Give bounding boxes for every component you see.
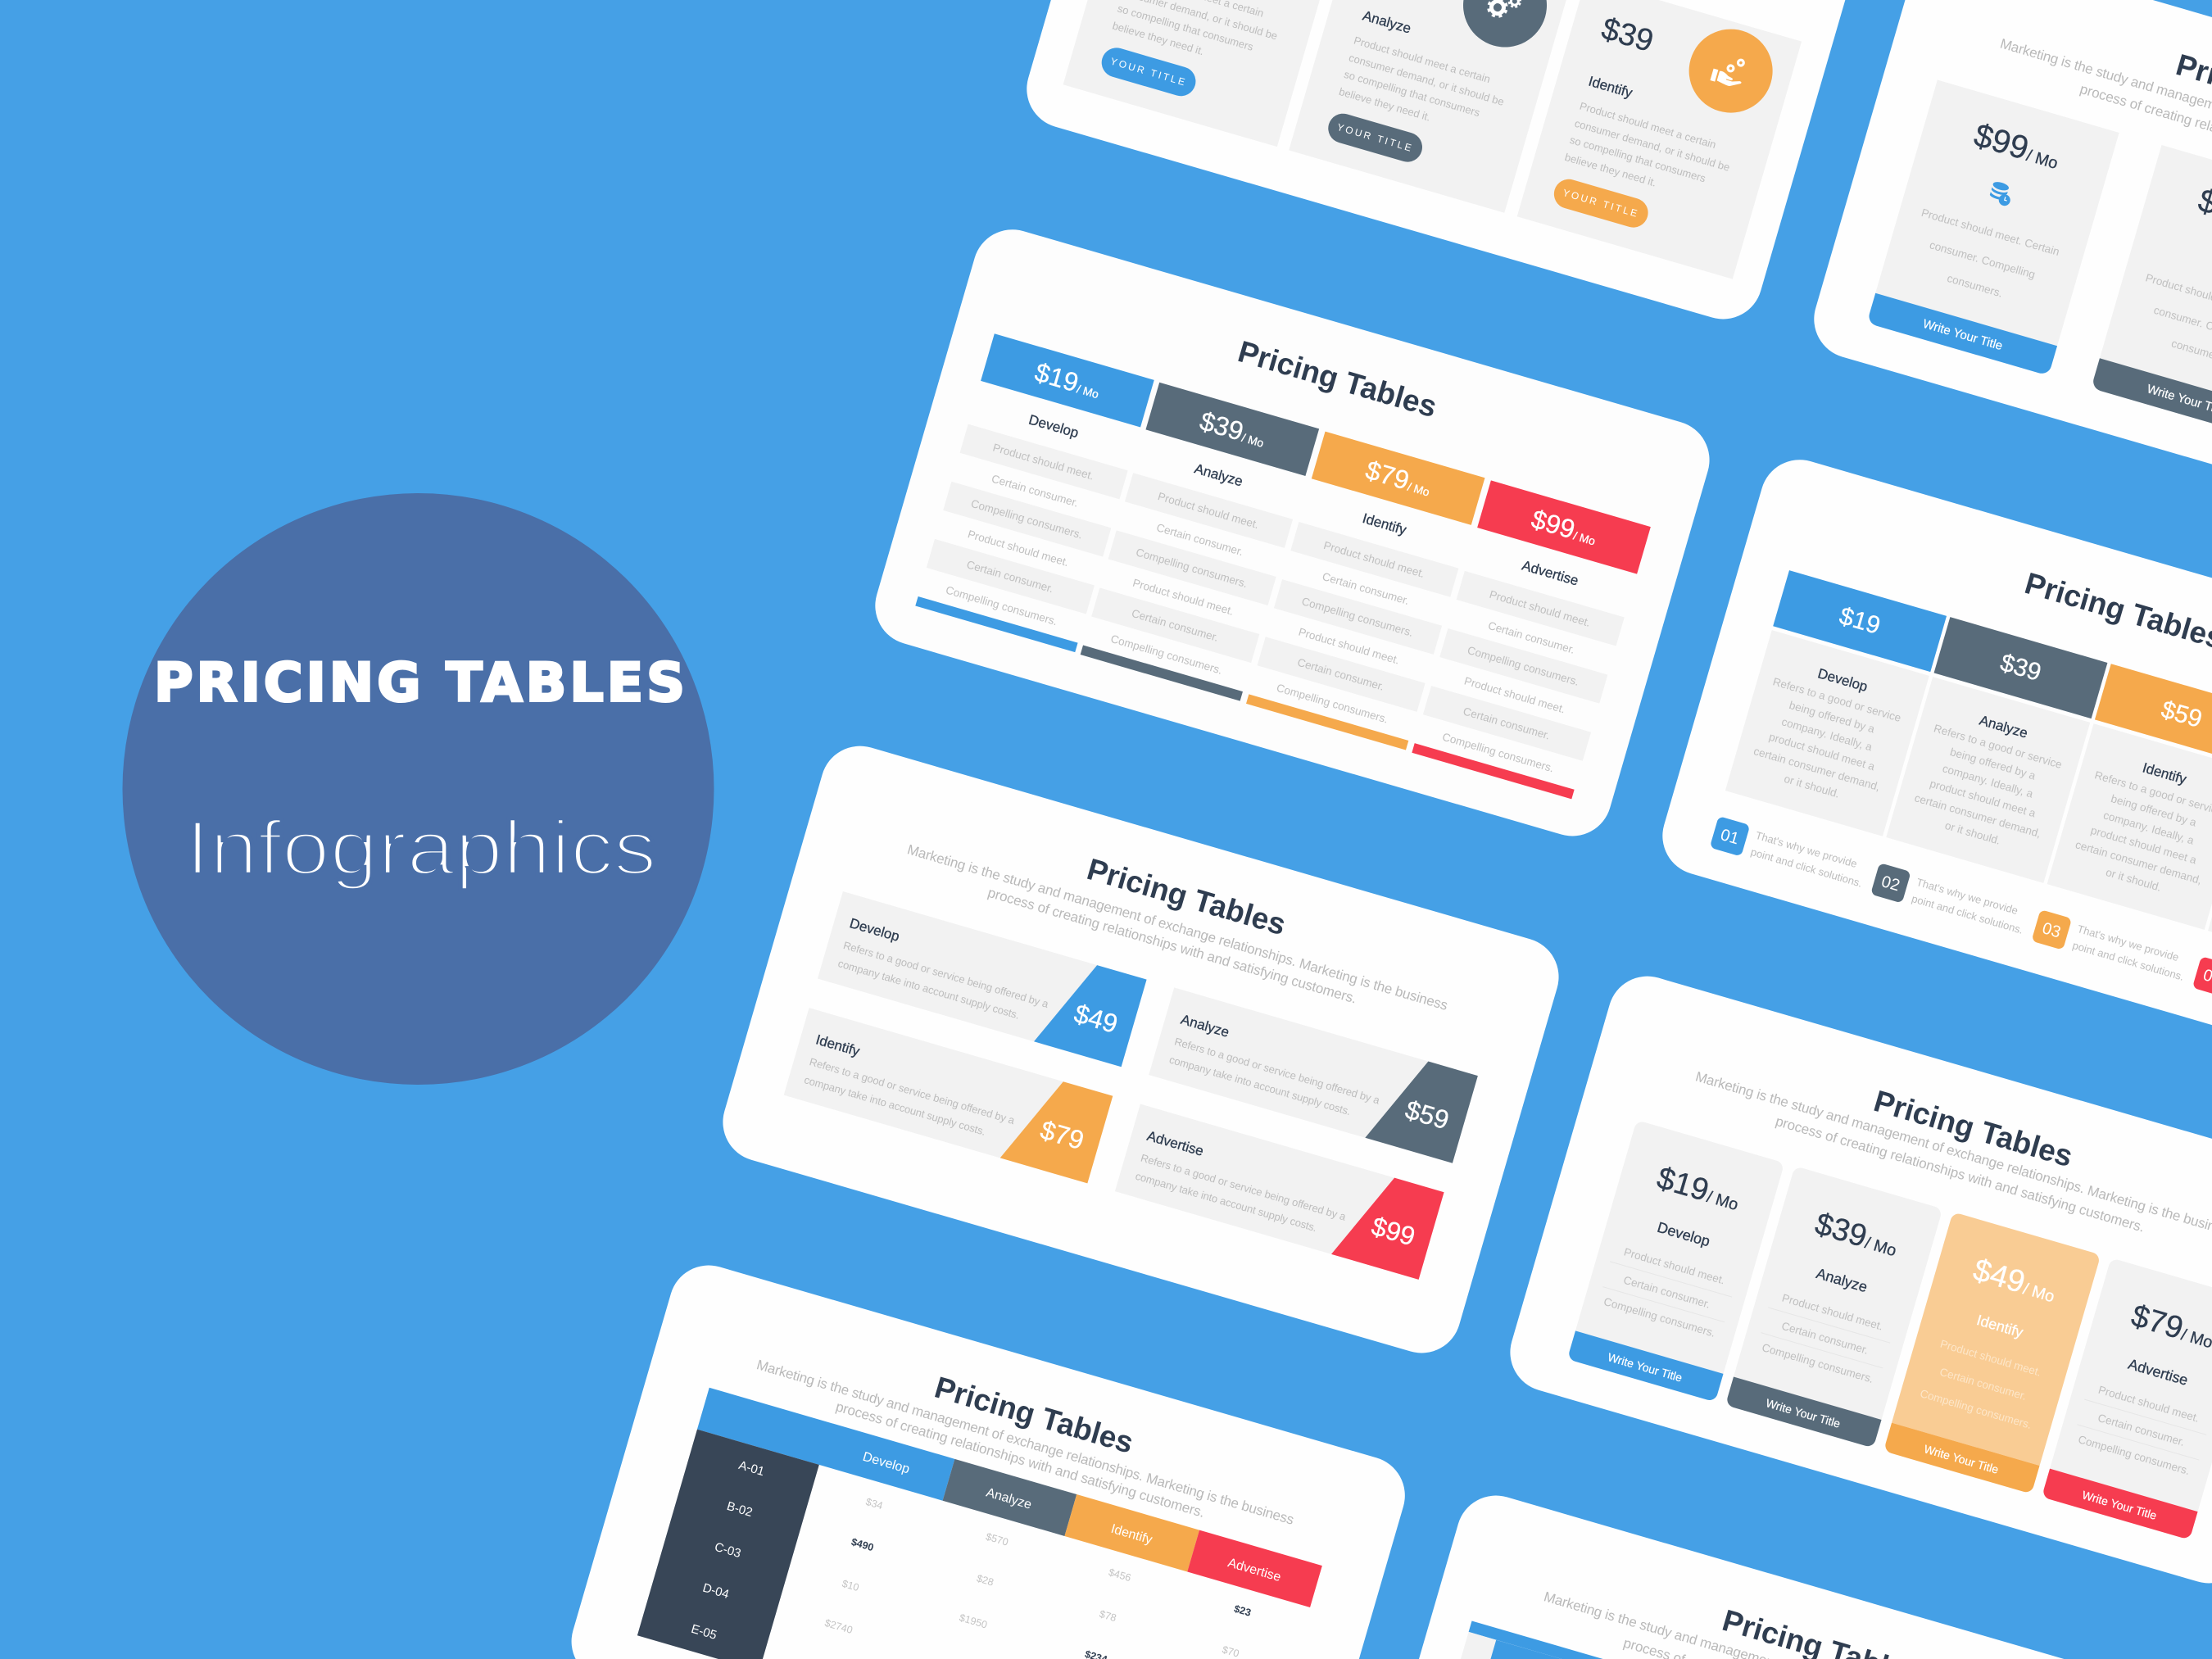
legend 02: 02: [1879, 873, 1902, 895]
subheading: infographics: Infographics: [185, 805, 657, 891]
striped rows: Product should meet.: [1297, 626, 1401, 667]
plan 1 price: $99/ Mo: [1970, 117, 2064, 176]
body: [1886, 677, 2090, 883]
description: Refers to a good or service: [1771, 675, 1902, 724]
column 2 background: [1289, 0, 1574, 213]
price: $79: [1037, 1115, 1087, 1155]
description: being offered by a: [2110, 792, 2198, 829]
column 3 description: [1563, 100, 1736, 207]
price tag: [1034, 954, 1147, 1067]
values: analyze: [958, 1530, 1013, 1631]
column 2 description: Product should meet a certain: [1353, 34, 1492, 85]
features: Certain consumer.: [1780, 1320, 1870, 1357]
values: advertise: $23: [1233, 1603, 1253, 1619]
price: $39: [1997, 649, 2044, 687]
price: $99/ Mo: [1528, 504, 1601, 551]
column: develop: [1725, 570, 1947, 836]
legend 03: point and click solutions.: [2071, 939, 2186, 983]
icon: hand with coins in orange circle: [1679, 19, 1783, 123]
features: Certain consumer.: [1938, 1366, 2028, 1403]
description: [1907, 722, 2064, 858]
column 3 background: [1517, 0, 1802, 279]
subtitle: process of creating relationships with and satisfying customers.: [986, 885, 1358, 1007]
body: [1725, 630, 1929, 836]
label: Advertise: [1521, 558, 1580, 589]
striped rows: Product should meet.: [991, 442, 1095, 483]
plan 2: [2091, 145, 2212, 441]
label: Identify: [1974, 1312, 2025, 1340]
legend 02: That's why we provide: [1915, 876, 2019, 917]
subtitle: process of creating relationships with and satisfying customers.: [834, 1398, 1207, 1521]
subtitle: Marketing is the study and management of exchange relationships. Marketing is the business: [905, 841, 1449, 1013]
column: identify: [1246, 432, 1484, 750]
label: Analyze: [1978, 713, 2029, 741]
footer: [1725, 1376, 1882, 1448]
column 3 description: consumer demand, or it should be: [1573, 117, 1731, 174]
footer label: Write Your Title: [1923, 1442, 2001, 1476]
plan 1 footer: [1867, 293, 2057, 376]
striped rows: Compelling consumers.: [1135, 546, 1249, 590]
legend 03: [2032, 909, 2191, 985]
row labels: B-02: [725, 1499, 754, 1520]
subtitle: [1992, 36, 2212, 228]
row labels: C-03: [713, 1540, 742, 1561]
panel: four row pricing list: [714, 737, 1568, 1362]
column: analyze: [1081, 383, 1319, 701]
header: advertise: [1187, 1530, 1322, 1607]
price: $49/ Mo: [1969, 1253, 2060, 1309]
price: $19/ Mo: [1653, 1161, 1744, 1217]
striped rows: [1086, 473, 1293, 684]
description: being offered by a: [1949, 746, 2037, 782]
striped rows: Compelling consumers.: [1300, 595, 1415, 639]
features: [2072, 1380, 2212, 1479]
footer: [1567, 1330, 1724, 1402]
values: identify: [1083, 1566, 1132, 1659]
description: product should meet a: [1768, 731, 1877, 773]
subtitle: [1536, 1589, 2086, 1659]
plan: advertise: [2042, 1258, 2212, 1540]
description: Refers to a good or service being offered by a: [1140, 1152, 1348, 1223]
label: Analyze: [1179, 1012, 1231, 1040]
column 3 button: YOUR TITLE: [1562, 187, 1641, 220]
features: Product should meet.: [1622, 1245, 1726, 1286]
price tag: [1331, 1167, 1444, 1280]
label: Develop: [1816, 665, 1870, 695]
price: $59: [1402, 1095, 1453, 1135]
values: analyze: $1950: [958, 1611, 989, 1631]
label: Develop: [1656, 1219, 1712, 1249]
features: Certain consumer.: [1622, 1274, 1711, 1311]
description: or it should.: [2105, 866, 2163, 894]
striped rows: Product should meet.: [1157, 490, 1260, 531]
item: develop: [818, 891, 1147, 1067]
values: develop: [823, 1494, 890, 1636]
legend 03: 03: [2040, 919, 2063, 942]
panel: comparison table: [562, 1256, 1414, 1659]
row labels: D-04: [701, 1581, 731, 1602]
legend 01: point and click solutions.: [1749, 845, 1864, 890]
row labels: A-01: [737, 1458, 766, 1479]
striped rows: [1417, 571, 1625, 782]
striped rows: Product should meet.: [1463, 674, 1566, 715]
values: develop: $490: [850, 1536, 875, 1553]
description: company take into account supply costs.: [1168, 1054, 1353, 1117]
header: develop: Develop: [861, 1450, 911, 1477]
striped rows: Product should meet.: [967, 528, 1070, 569]
table header strip: [1469, 1620, 2132, 1659]
panel: rounded plan cards: [1501, 967, 2212, 1593]
features: Compelling consumers.: [1919, 1387, 2033, 1431]
features: Compelling consumers.: [1602, 1295, 1716, 1339]
subtitle: Marketing is the study and management of exchange relationships. Marketing is the business: [755, 1357, 1296, 1528]
striped rows: Compelling consumers.: [969, 497, 1084, 542]
description: company take into account supply costs.: [836, 957, 1021, 1022]
header: advertise: Advertise: [1226, 1556, 1282, 1584]
header: develop: [697, 1388, 954, 1501]
bottom bar: [1081, 646, 1243, 701]
striped rows: Compelling consumers.: [1275, 682, 1389, 726]
column: analyze: [1886, 617, 2107, 883]
column 2 label: Analyze: [1361, 7, 1413, 37]
values: analyze: $28: [976, 1572, 995, 1589]
legend 02: [1870, 863, 2030, 938]
row labels: [637, 1430, 819, 1659]
description: certain consumer demand,: [2074, 838, 2203, 886]
description: company. Ideally, a: [1941, 762, 2035, 800]
striped rows: Certain consumer.: [1296, 656, 1385, 693]
header: analyze: [943, 1459, 1077, 1536]
title: Pricing Tables: [931, 1371, 1137, 1460]
plan 1 description: [1905, 206, 2061, 311]
title: Pricing Tables: [1235, 334, 1440, 424]
item: advertise: [1115, 1104, 1444, 1280]
features: Product should meet.: [2097, 1384, 2201, 1425]
plan: identify highlighted: [1883, 1212, 2101, 1494]
panel: bottom right card: [1349, 1486, 2204, 1659]
description: company. Ideally, a: [2102, 809, 2196, 847]
footer label: Write Your Title: [1765, 1396, 1842, 1430]
column 1 button: [1098, 44, 1199, 100]
column 1 background: [1063, 0, 1346, 147]
description: [1747, 675, 1902, 811]
header: identify: Identify: [1109, 1522, 1154, 1548]
features: [1919, 1336, 2048, 1431]
heading: pricing tables: PRICING TABLES: [154, 652, 685, 714]
label: Develop: [1027, 412, 1081, 441]
striped rows: Product should meet.: [1131, 577, 1235, 618]
price: $19/ Mo: [1031, 357, 1104, 404]
values: identify: $456: [1108, 1566, 1132, 1584]
icon: database with clock: [1988, 180, 2015, 207]
description: Refers to a good or service being offered by a: [1173, 1036, 1382, 1107]
column 2 button: YOUR TITLE: [1335, 121, 1415, 154]
description: Refers to a good or service being offered by a: [808, 1055, 1017, 1126]
price tag: [1000, 1071, 1113, 1183]
bottom bar: [1246, 694, 1408, 750]
column 3 label: Identify: [1587, 73, 1634, 101]
striped rows: Product should meet.: [1322, 539, 1426, 580]
label: Identify: [2141, 759, 2188, 787]
subtitle: process of creating relationships with and satisfying customers.: [1774, 1113, 2146, 1235]
description: [2068, 768, 2212, 904]
striped rows: Compelling consumers.: [1466, 644, 1580, 688]
price: $99: [1368, 1211, 1418, 1252]
price: $19: [1836, 602, 1883, 640]
values: develop: $2740: [823, 1617, 854, 1636]
icon: gears in slate circle: [1453, 0, 1557, 57]
column: develop: [915, 333, 1154, 652]
column: identify: [2047, 664, 2212, 930]
plan 1 description: consumer. Compelling: [1929, 238, 2037, 281]
column 1 description: so compelling that consumers: [1116, 2, 1255, 53]
striped rows: Certain consumer.: [1321, 570, 1411, 607]
striped rows: Compelling consumers.: [1109, 632, 1224, 677]
description: company take into account supply costs.: [803, 1073, 987, 1138]
footer label: Write Your Title: [1607, 1350, 1684, 1385]
column 3 description: Product should meet a certain: [1578, 100, 1717, 151]
striped rows: Certain consumer.: [1487, 619, 1576, 656]
table blue block: [1450, 1640, 2128, 1659]
legend 04: [2192, 956, 2212, 997]
price: $39/ Mo: [1811, 1207, 1902, 1263]
panel: numbered legend pricing table: [1653, 451, 2212, 1076]
plan 1 description: Product should meet. Certain: [1920, 206, 2061, 258]
title circle: [123, 493, 714, 1085]
description: Refers to a good or service: [1933, 722, 2064, 771]
legend 01: [1710, 816, 1869, 891]
column 2 description: consumer demand, or it should be: [1348, 52, 1506, 108]
description: company. Ideally, a: [1780, 715, 1874, 754]
features: Product should meet.: [1938, 1338, 2042, 1379]
panel: top right card with three plans: [1805, 0, 2212, 559]
column 2 description: [1338, 34, 1511, 142]
features: Compelling consumers.: [2077, 1433, 2192, 1477]
features: Compelling consumers.: [1761, 1341, 1875, 1385]
label: Analyze: [1815, 1265, 1870, 1295]
label: Identify: [1361, 510, 1408, 538]
price: $59: [2158, 696, 2205, 733]
table first column: [1423, 1632, 1496, 1659]
description: certain consumer demand,: [1752, 745, 1882, 793]
label: Advertise: [1145, 1128, 1205, 1159]
striped rows: Certain consumer.: [965, 558, 1055, 595]
panel: top card with circle icons and buttons: [1018, 0, 1870, 329]
column 1 description: [1111, 0, 1284, 76]
description: being offered by a: [1788, 699, 1876, 736]
plan: analyze: [1725, 1166, 1942, 1448]
description: product should meet a: [2089, 824, 2198, 867]
panel: four column striped pricing table: [866, 220, 1719, 845]
footer: [1883, 1423, 2040, 1494]
striped rows: Compelling consumers.: [945, 583, 1058, 628]
bottom bar: [1412, 743, 1575, 799]
column 3 price: $39: [1598, 11, 1657, 59]
description: company take into account supply costs.: [1134, 1170, 1318, 1234]
description: Refers to a good or service being offered by a: [842, 939, 1050, 1010]
label: Advertise: [2126, 1356, 2190, 1389]
description: or it should.: [1943, 819, 2002, 847]
features: Certain consumer.: [2096, 1412, 2186, 1448]
price: $49: [1071, 999, 1121, 1039]
body: [2047, 723, 2212, 930]
plan 1: [1867, 80, 2119, 376]
legend 01: That's why we provide: [1754, 829, 1858, 870]
plan: develop: [1567, 1120, 1784, 1402]
values: identify: $78: [1098, 1608, 1117, 1624]
values: advertise: [1221, 1603, 1253, 1659]
price: $79/ Mo: [1362, 455, 1435, 502]
footer: [2042, 1469, 2198, 1540]
title: Pricing Tables: [1083, 852, 1290, 941]
plan 1 footer label: Write Your Title: [1921, 317, 2004, 353]
column 3 description: so compelling that consumers: [1568, 134, 1707, 184]
column 2 description: believe they need it.: [1338, 85, 1432, 124]
plan 1 description: consumers.: [1946, 272, 2004, 300]
striped rows: [1251, 522, 1458, 732]
striped rows: Certain consumer.: [1155, 521, 1244, 558]
striped rows: Product should meet.: [1488, 588, 1592, 629]
values: develop: $34: [864, 1496, 884, 1512]
features: [1598, 1243, 1738, 1341]
features: Product should meet.: [1780, 1292, 1884, 1333]
striped rows: Certain consumer.: [1131, 607, 1220, 644]
column 3 description: believe they need it.: [1563, 151, 1658, 189]
title: Pricing Tables: [1870, 1084, 2076, 1173]
bottom bar: [915, 596, 1078, 652]
label: Identify: [814, 1031, 862, 1059]
plan 2 description: [2128, 271, 2212, 377]
legend 02: point and click solutions.: [1911, 892, 2024, 936]
column 2 description: so compelling that consumers: [1343, 68, 1482, 119]
price tag: [1365, 1050, 1478, 1163]
column 1 button: YOUR TITLE: [1109, 56, 1188, 88]
column 3 button: [1551, 175, 1652, 231]
header: identify: [1064, 1494, 1199, 1571]
striped rows: Certain consumer.: [990, 473, 1080, 510]
description: product should meet a: [1929, 777, 2037, 820]
row labels: E-05: [690, 1622, 718, 1643]
striped rows: [920, 424, 1128, 635]
description: or it should.: [1783, 773, 1841, 800]
plan 2 footer: [2091, 358, 2212, 441]
column 2 button: [1325, 110, 1426, 165]
footer label: Write Your Title: [2081, 1488, 2159, 1522]
item: identify: [784, 1008, 1113, 1183]
label: Analyze: [1193, 460, 1244, 490]
column: advertise: [2208, 710, 2212, 977]
header: analyze: Analyze: [985, 1486, 1033, 1512]
values: develop: $10: [841, 1578, 860, 1593]
striped rows: Certain consumer.: [1462, 705, 1552, 741]
column 1 description: believe they need it.: [1111, 20, 1205, 57]
price: $39/ Mo: [1197, 406, 1269, 453]
item: analyze: [1149, 987, 1478, 1163]
striped rows: Compelling consumers.: [1441, 731, 1555, 774]
description: certain consumer demand,: [1913, 791, 2042, 840]
legend 03: That's why we provide: [2076, 922, 2180, 963]
values: analyze: $570: [985, 1531, 1009, 1548]
legend 01: 01: [1719, 826, 1741, 848]
label: Develop: [848, 915, 901, 945]
column: advertise: [1412, 480, 1651, 799]
features: [1756, 1289, 1896, 1387]
